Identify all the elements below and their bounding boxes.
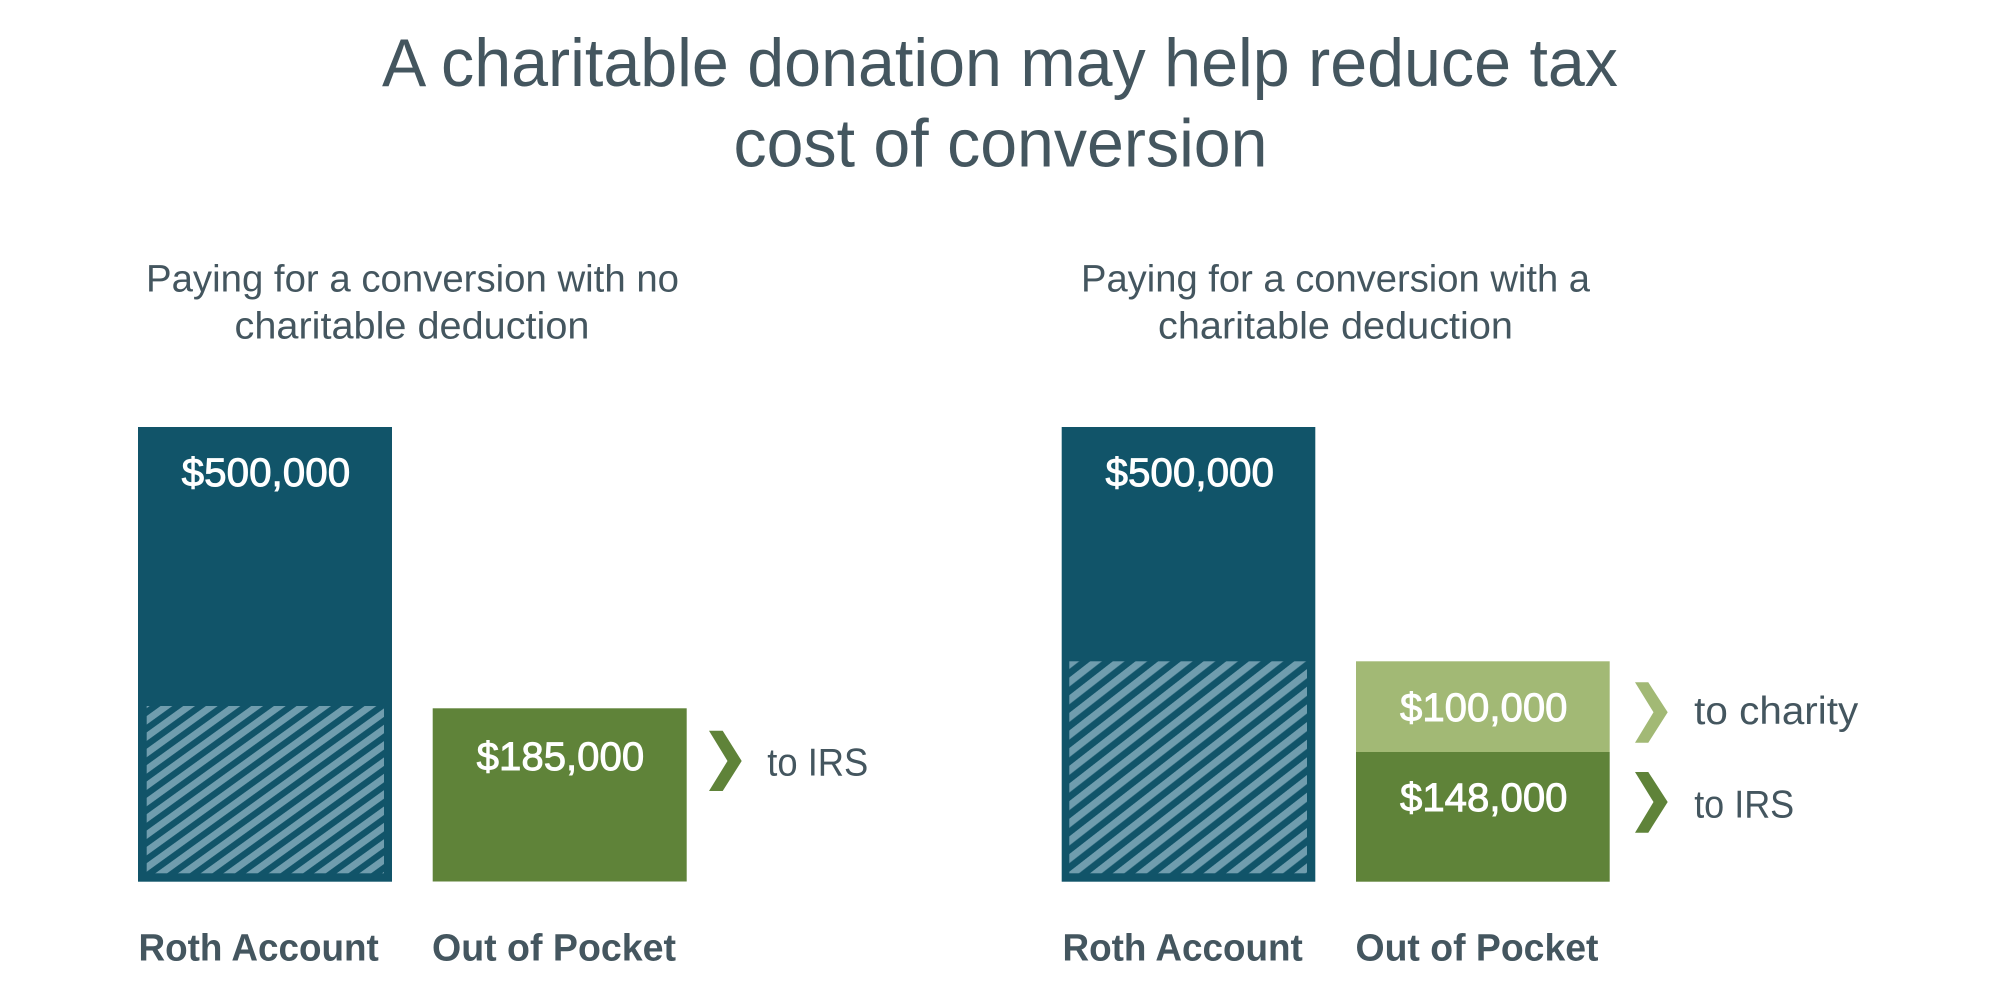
subheading: with charitable deduction	[1081, 259, 1591, 347]
title	[382, 25, 1618, 182]
segment: to IRS	[1356, 752, 1610, 882]
segment: to charity	[1356, 661, 1610, 752]
bar: Roth account: $500,000	[182, 451, 350, 495]
arrow: to charity	[1635, 682, 1668, 743]
panel: with charitable deduction	[1062, 259, 1859, 970]
label: to charity: to charity	[1694, 690, 1859, 733]
value: charity: $100,000	[1400, 686, 1568, 730]
subheading: with charitable deduction: Paying for a conversion with a	[1081, 259, 1591, 301]
bar: out of pocket	[433, 708, 687, 882]
bar: Roth account	[1062, 427, 1315, 882]
label: Roth Account: Roth Account	[1062, 928, 1303, 970]
subheading: no charitable deduction: Paying for a conversion with no	[146, 259, 679, 301]
subheading: with charitable deduction: charitable deduction	[1158, 305, 1513, 347]
subheading: no charitable deduction	[146, 259, 679, 347]
subheading: no charitable deduction: charitable deduction	[234, 305, 590, 347]
label: Roth Account: Roth Account	[138, 928, 379, 970]
bar: out of pocket stacked	[1356, 661, 1610, 882]
hatched conversion portion	[1069, 661, 1307, 873]
title: A charitable donation may help reduce tax	[382, 25, 1618, 101]
arrow: to IRS	[1635, 772, 1668, 833]
bar: out of pocket: $185,000	[477, 735, 644, 779]
arrow: to IRS	[709, 731, 742, 791]
value: IRS: $148,000	[1400, 776, 1568, 820]
bar: Roth account	[138, 427, 392, 882]
label: Out of Pocket: Out of Pocket	[432, 928, 676, 970]
label: to IRS: to IRS	[1694, 784, 1794, 827]
label: Out of Pocket: Out of Pocket	[1356, 928, 1599, 970]
title: cost of conversion	[734, 106, 1268, 182]
panel: no charitable deduction	[138, 259, 868, 970]
bar: Roth account: $500,000	[1106, 451, 1274, 495]
hatched conversion portion	[147, 706, 384, 873]
label: to IRS: to IRS	[767, 742, 868, 785]
